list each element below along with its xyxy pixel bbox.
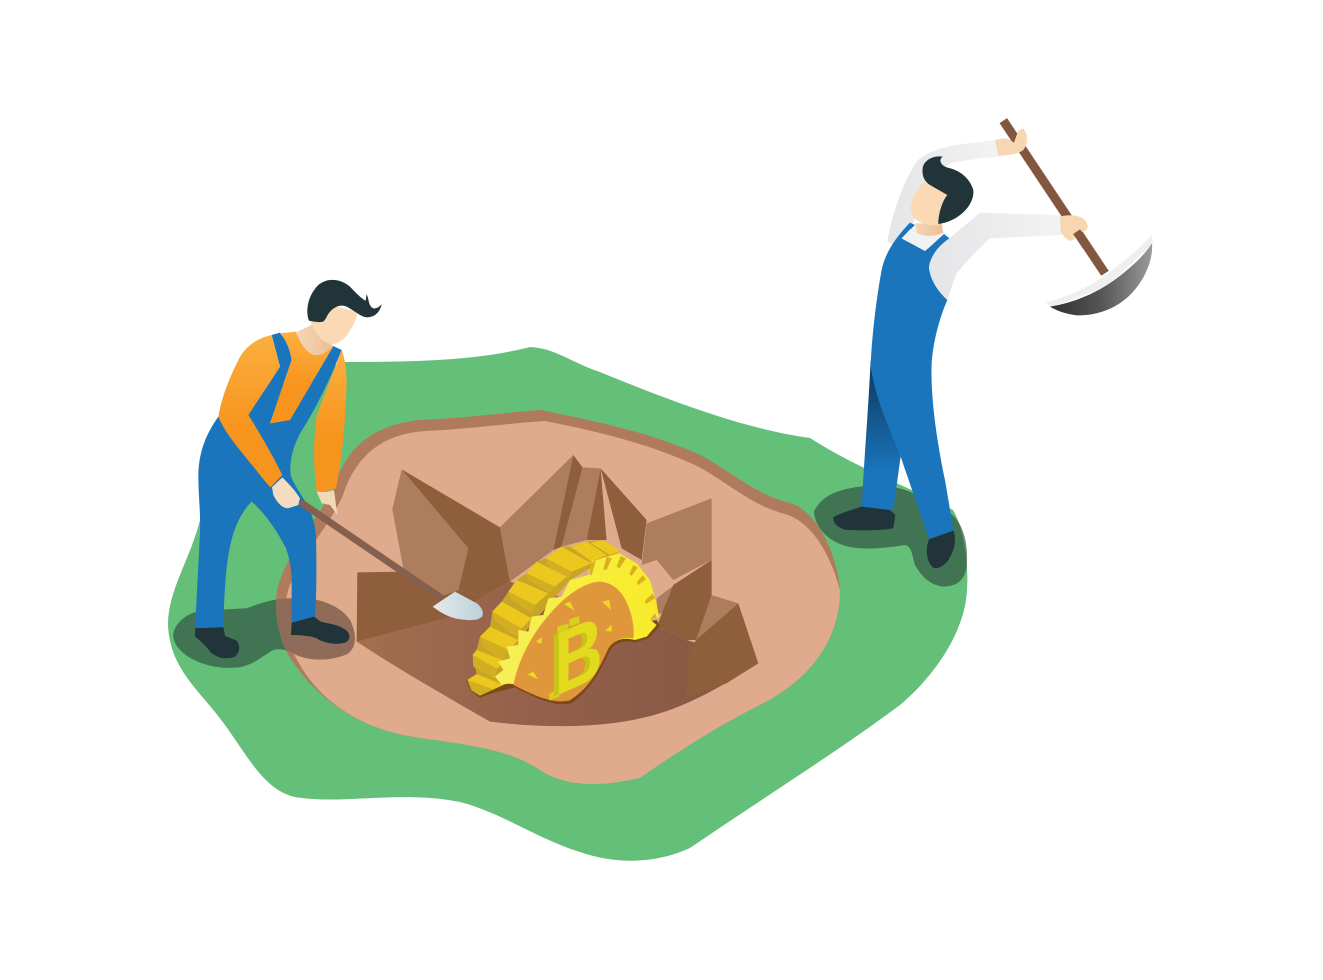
rock sliver light — [601, 468, 623, 550]
overalls front — [871, 223, 954, 539]
hair — [922, 156, 973, 224]
front boot — [927, 531, 955, 568]
right hand — [317, 490, 337, 515]
rock lower facet — [657, 585, 674, 613]
rock facet far right dark — [657, 560, 712, 640]
man on left with shovel — [195, 280, 483, 658]
bitcoin B letter: B — [554, 595, 603, 716]
neck — [296, 323, 333, 355]
rock facet centre light — [500, 455, 573, 582]
strap right — [925, 234, 949, 253]
coin gear teeth top faces — [467, 540, 620, 689]
coin shadow edge — [466, 620, 660, 704]
rock facet left tall dark — [402, 469, 510, 597]
ground: green grass patch — [168, 347, 967, 861]
illustration: two miners digging a bitcoin out of the ground — [168, 118, 1153, 861]
coin gold side body — [467, 540, 620, 696]
pick handle — [1003, 121, 1105, 273]
face — [310, 305, 357, 344]
rock facet right light — [642, 498, 712, 580]
left arm sleeve — [218, 335, 282, 487]
shirt collar — [902, 223, 948, 251]
pick head edge — [1046, 235, 1153, 307]
hair — [307, 280, 382, 322]
dirt mound outer rim — [276, 410, 840, 784]
dirt mound inner surface — [285, 421, 840, 784]
pick head blade — [1050, 243, 1152, 315]
rock facet left tall light — [392, 469, 468, 597]
bitcoin B letter: B — [549, 597, 598, 718]
bitcoin gear coin half buried — [466, 540, 660, 718]
front arm sleeve — [929, 213, 1062, 300]
coin bright rim with teeth — [495, 553, 659, 701]
man on right with pickaxe — [814, 121, 1153, 587]
coin tooth side faces — [467, 558, 572, 696]
left man foot shadow on grass — [173, 598, 355, 668]
handle below hand — [1077, 232, 1087, 247]
pit floor — [357, 582, 758, 726]
lower hand — [1060, 215, 1088, 241]
upper hand — [995, 128, 1027, 156]
overalls back leg shaded — [862, 360, 901, 509]
rock facet spire dark — [587, 468, 607, 540]
right arm sleeve — [314, 350, 347, 492]
chest shirt — [270, 332, 333, 423]
rock facet spire light — [562, 467, 601, 547]
upper raised arm sleeve — [887, 140, 998, 247]
left man foot shadow over dirt — [276, 598, 355, 660]
shovel blade — [433, 592, 483, 620]
coin tooth shading marks — [589, 556, 657, 619]
rock facet right dark — [601, 468, 647, 560]
shovel handle — [301, 502, 442, 598]
neck — [915, 223, 943, 236]
pit with rock facets — [357, 455, 758, 726]
rock facet centre dark — [553, 455, 583, 550]
coin small sparkle marks — [527, 600, 612, 679]
left hand — [272, 477, 300, 508]
back boot — [195, 627, 239, 658]
face — [910, 182, 947, 225]
rock facet far right light — [696, 595, 738, 640]
front boot — [291, 617, 349, 644]
foot shadow — [814, 486, 967, 587]
rock facet left low — [357, 572, 483, 642]
coin orange centre — [513, 582, 634, 701]
rock facet far right lower — [686, 603, 758, 698]
rock sliver right — [647, 560, 674, 598]
back boot — [833, 507, 895, 530]
overalls — [195, 333, 342, 629]
